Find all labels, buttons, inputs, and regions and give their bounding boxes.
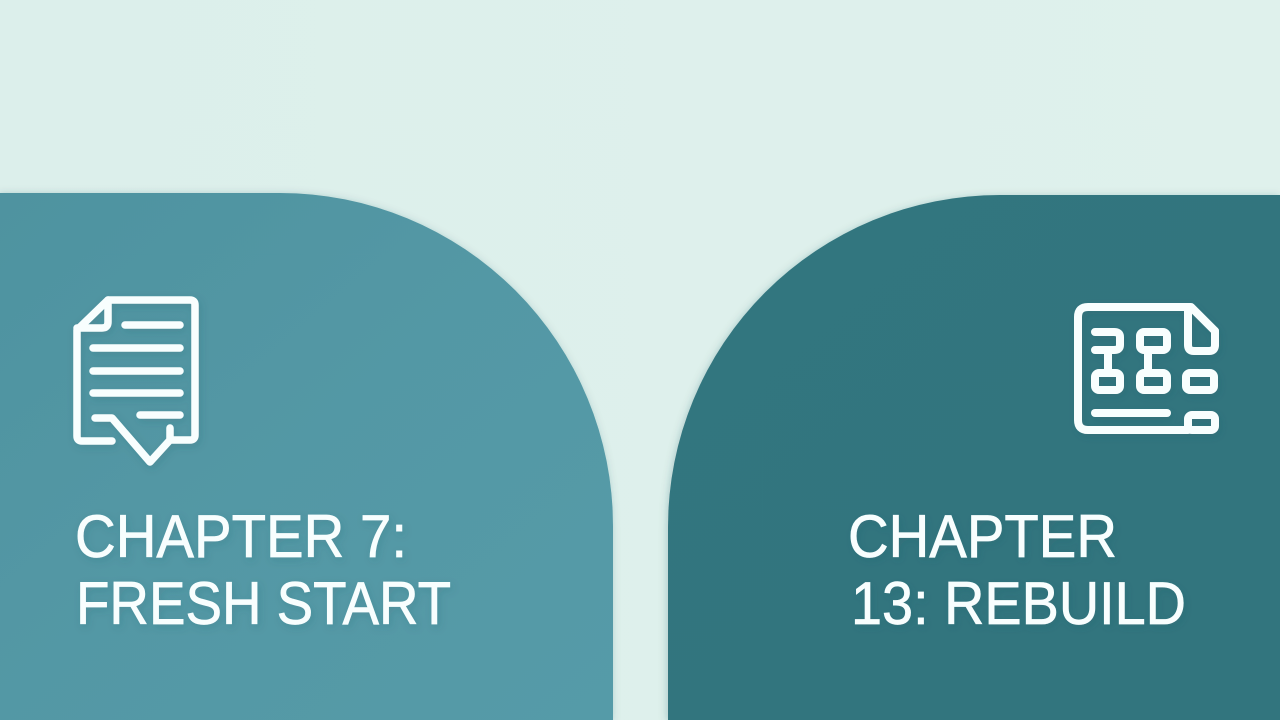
icon: document with speech tail (77, 300, 195, 462)
heading: Chapter 13: 13: REBUILD (851, 570, 1186, 637)
heading: Chapter 7: FRESH START (76, 570, 451, 637)
heading: Chapter 7: CHAPTER 7: (75, 503, 407, 570)
panel: Chapter 13 (668, 195, 1280, 720)
icon: document with flowchart (1078, 307, 1215, 430)
panel: Chapter 7 (0, 193, 613, 720)
heading: Chapter 13 (848, 503, 1186, 637)
heading: Chapter 13: CHAPTER (848, 503, 1117, 570)
heading: Chapter 7 (75, 503, 451, 637)
